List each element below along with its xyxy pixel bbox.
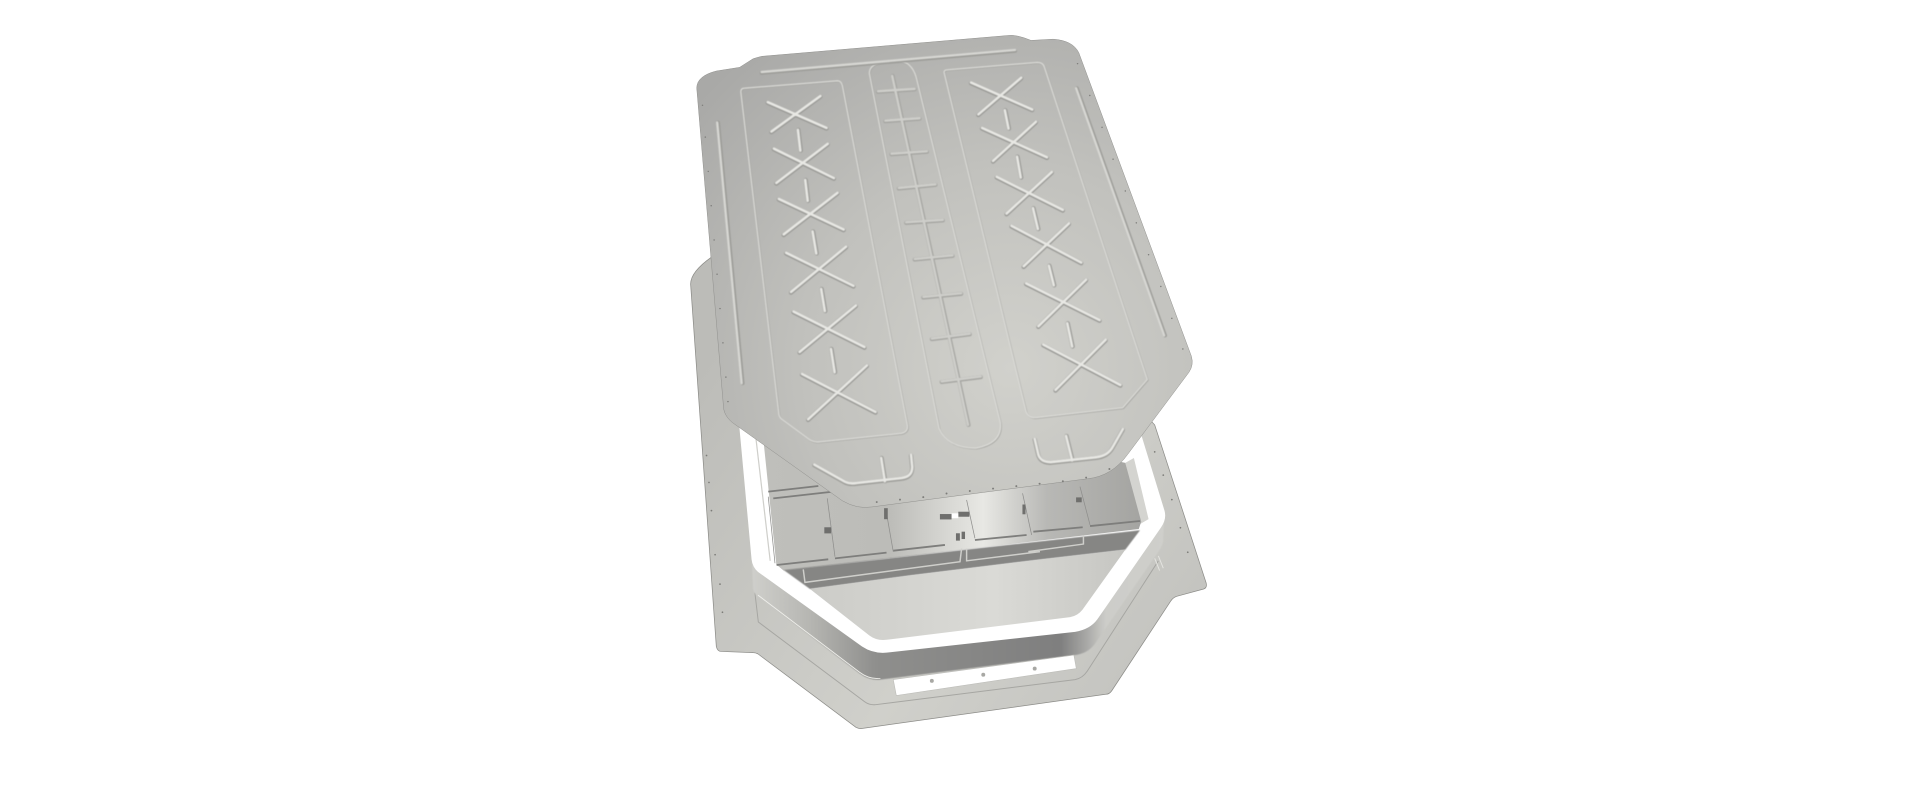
interior: back wall panels [763, 404, 1141, 571]
interior: wall tab blocks [824, 497, 1082, 541]
tray: outer side wall [752, 511, 1164, 680]
tray: interior [756, 404, 1149, 640]
interior: channel light ribs [803, 535, 1083, 582]
tray: small double stripe at right corner [1155, 556, 1163, 571]
tray: white rim [738, 367, 1165, 653]
lid: right column cross ribs [971, 78, 1120, 391]
interior: panel white gap [952, 513, 958, 518]
lid: main plate [697, 35, 1192, 507]
lid: panel outlines [741, 61, 1148, 449]
interior: floor [810, 550, 1125, 640]
tray: white cut-out slot with holes [893, 655, 1076, 696]
tray: wall lower lip line [758, 595, 880, 679]
tray: flange rivet dots [706, 451, 1189, 613]
lid: left column cross ribs [768, 96, 876, 420]
interior: left inner wall strips [756, 435, 770, 561]
tray: mounting flange [691, 245, 1206, 729]
interior: dark rails along panel bases [768, 486, 1140, 565]
lid: panel outline highlights [741, 61, 1147, 448]
tray: flange groove line [755, 561, 1158, 705]
interior: right inner wall strip [1125, 458, 1149, 524]
interior: panel seams [768, 487, 1090, 563]
lid: centre spine with cross ticks [878, 76, 981, 425]
lid: panel outline shadows [741, 62, 1148, 449]
lid: lower U-shaped ribs [814, 429, 1123, 484]
interior: dark lower channel [784, 530, 1140, 589]
lid: long edge ribs [717, 50, 1165, 383]
lid: perimeter rivet dots [702, 63, 1184, 503]
